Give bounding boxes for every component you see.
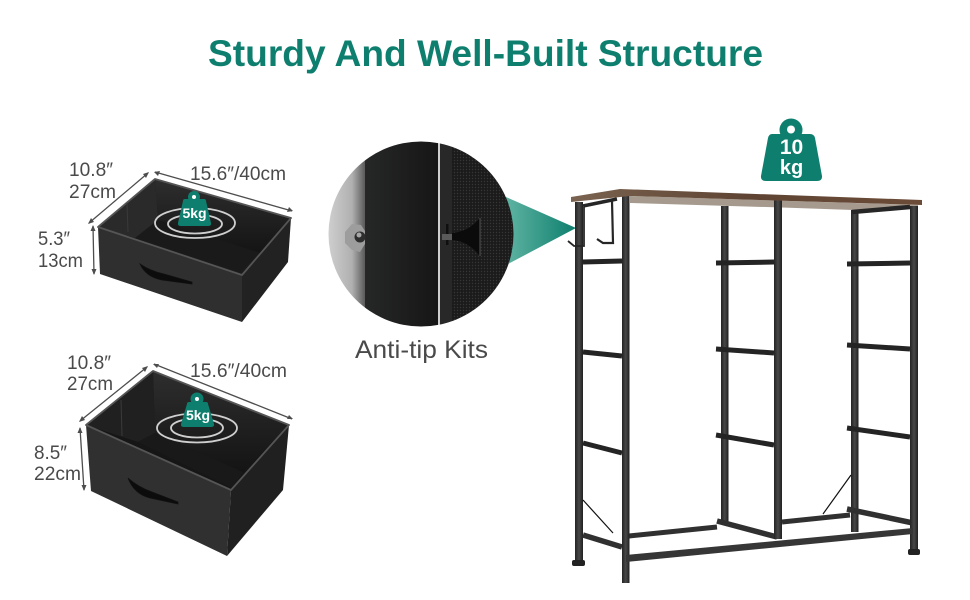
- load rings: [157, 414, 237, 442]
- dimension arrows: [78, 364, 293, 491]
- dimension labels: 8.5″: [34, 443, 67, 464]
- title: Sturdy And Well-Built Structure: [208, 33, 763, 74]
- magnified detail circle: [328, 141, 515, 327]
- dimension labels: 13cm: [38, 251, 83, 272]
- shelf rails: [583, 261, 910, 453]
- bottom side rails: [583, 509, 913, 547]
- deep drawer handle: [128, 478, 178, 504]
- deep drawer body: [86, 371, 289, 556]
- wood tabletop: [571, 189, 922, 205]
- icon: 10kg weight: kg: [780, 157, 803, 179]
- icon: 5kg weight: 5kg: [186, 407, 210, 423]
- product frame: [568, 189, 922, 583]
- panel: deep drawer: [34, 353, 293, 556]
- dimension labels: 15.6″/40cm: [190, 164, 286, 185]
- teal pointer: [506, 197, 576, 264]
- top brackets and hooks: [568, 199, 910, 246]
- dimension labels: 27cm: [67, 374, 113, 395]
- callout: anti-tip kit: [328, 141, 576, 364]
- shallow drawer body: [98, 179, 291, 322]
- dimension labels: 5.3″: [38, 229, 70, 250]
- front bottom rail: [626, 528, 913, 562]
- tie cables: [583, 475, 851, 533]
- dimension labels: 10.8″: [67, 353, 111, 374]
- dimension labels: 15.6″/40cm: [190, 361, 287, 382]
- load rings: [155, 208, 235, 238]
- icon: wall bolt: [345, 224, 366, 252]
- icon: 10kg weight: [761, 118, 822, 181]
- front legs: [622, 196, 918, 583]
- dimension labels: 22cm: [34, 464, 81, 485]
- feet: [572, 549, 920, 566]
- dimension labels: [38, 160, 286, 272]
- dimension labels: 10.8″: [69, 160, 113, 181]
- dimension labels: [34, 353, 287, 485]
- icon: 5kg weight: [178, 191, 211, 226]
- callout label: Anti-tip Kits: [355, 336, 488, 364]
- panel: shallow drawer: [38, 160, 293, 322]
- back bottom rails: [629, 515, 850, 536]
- icon: 5kg weight: [181, 392, 214, 427]
- shallow drawer handle: [140, 264, 192, 284]
- icon: 10kg weight: 10: [780, 136, 803, 159]
- tabletop underside: [630, 196, 918, 210]
- dimension labels: 27cm: [69, 182, 116, 203]
- dimension arrows: [88, 171, 293, 275]
- icon: 5kg weight: 5kg: [182, 205, 207, 221]
- rear legs: [575, 202, 858, 560]
- icon: flared anchor: [442, 218, 480, 256]
